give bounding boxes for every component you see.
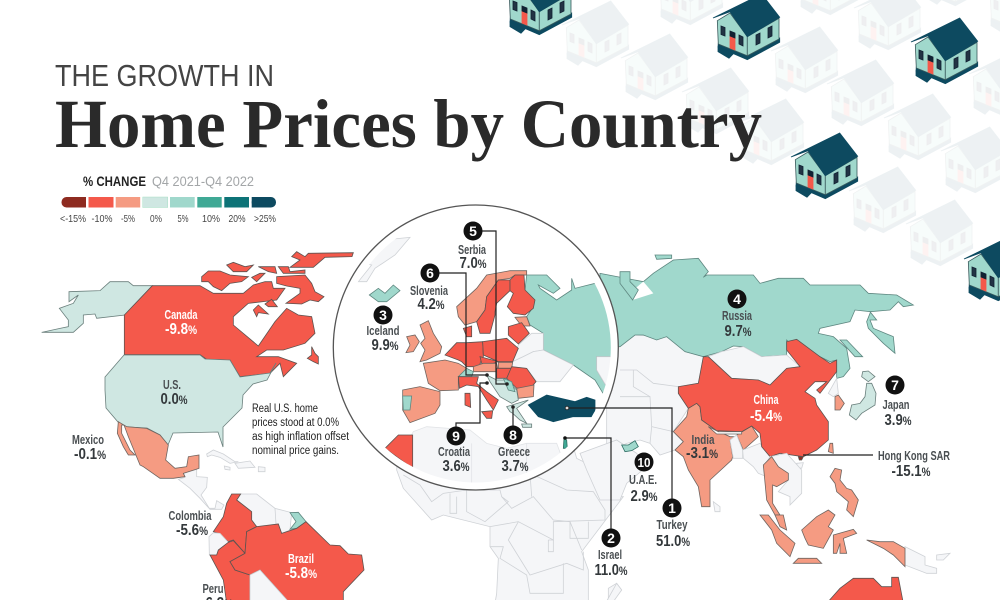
rank 9: Croatia [438,426,471,475]
italy [458,377,498,410]
leader lines [430,231,873,537]
rank 9: Croatia: 9 [452,428,460,444]
mexico [117,422,199,478]
france and iberia [423,360,467,391]
rank 3: Iceland: 9.9% [372,337,399,354]
label: Colombia [168,509,212,539]
label: Canada: -9.8% [165,321,197,338]
nordics [457,271,527,325]
label: Mexico [72,433,106,463]
note: real U.S. prices: prices stood at 0.0% [252,417,339,429]
rank 10: U.A.E. [629,452,658,505]
rank 2: Israel: 11.0% [594,562,628,579]
south america [209,494,364,600]
rank 8: Greece: 3.7% [502,458,529,475]
note: real U.S. prices: nominal price gains. [252,445,339,457]
label: China [750,393,782,425]
rank 3: Iceland: Iceland [366,324,400,338]
title: THE GROWTH IN [55,58,274,93]
label: China: China [754,393,779,407]
rank 4: Russia: 4 [733,291,741,307]
rank 5: Serbia: 7.0% [460,255,487,272]
rank 7: Japan: 3.9% [884,412,912,429]
north america [42,252,353,509]
mongolia [708,347,800,385]
legend: % CHANGE [83,173,146,189]
legend: 0% [150,213,162,225]
label: Peru: Peru [202,582,224,596]
note: real U.S. prices: as high inflation offset [252,431,350,443]
rank 1: Turkey: 1 [668,500,676,516]
legend [60,173,276,225]
legend: -10% [92,213,112,225]
circle inset: europe [333,205,623,500]
alaska [42,282,152,332]
label: Canada [164,308,198,338]
british isles [420,321,442,362]
rank 10: U.A.E.: 2.9% [630,488,658,505]
rank 7: Japan [882,376,912,429]
rank 6: Slovenia: 6 [426,265,434,281]
uae [622,441,638,452]
rank 1: Turkey [656,498,690,550]
label: Hong Kong SAR: -15.1% [892,463,931,480]
greenland [358,237,411,282]
title: Home Prices by Country [55,86,762,162]
rank 5: Serbia: 5 [469,223,477,239]
label: Hong Kong SAR: Hong Kong SAR [878,449,950,463]
legend: 20% [228,213,246,225]
rank 2: Israel: Israel [598,548,622,562]
rank 5: Serbia: Serbia [458,243,487,257]
label: Brazil [285,552,317,582]
rank 2: Israel: 2 [607,530,615,546]
label: Peru [201,582,233,600]
rank 7: Japan: 7 [891,377,899,393]
rank 1: Turkey: Turkey [656,518,688,532]
rank 3: Iceland [366,306,400,354]
rank 6: Slovenia [410,264,449,313]
label: Mexico: Mexico [72,433,104,447]
rank 8: Greece: 8 [509,427,517,443]
southeast asia [770,453,802,505]
label: India [686,433,718,462]
rank 10: U.A.E.: 10 [638,456,651,470]
label: India: -3.1% [686,445,718,462]
rank 5: Serbia [458,222,487,272]
rank 10: U.A.E.: U.A.E. [629,473,657,487]
rank 9: Croatia: 3.6% [442,458,470,475]
background houses [562,0,1000,266]
legend: <-15% [60,213,86,225]
canada [124,252,353,377]
label: India: India [692,433,715,447]
north africa in inset [412,426,560,482]
india [673,403,735,507]
label: U.S.: U.S. [163,378,181,392]
legend: 5% [178,213,188,225]
highlighted houses [505,0,1000,301]
japan [849,383,876,420]
world map: Middle East and Central Asia [580,335,703,500]
legend: 10% [202,213,220,225]
legend: Q4 2021-Q4 2022 [152,173,254,189]
rank 2: Israel [594,528,628,579]
label: Mexico: -0.1% [74,446,106,463]
legend: >25% [254,213,276,225]
label: Brazil: Brazil [288,552,314,566]
turkey [528,395,595,422]
china [678,339,837,457]
israel [563,438,567,448]
australia [827,577,903,600]
world map: Africa [397,423,623,600]
madagascar [607,583,622,600]
rank 4: Russia: Russia [722,309,753,323]
note: real U.S. prices [252,403,350,457]
label: China: -5.4% [750,408,782,425]
rank 8: Greece: Greece [498,445,530,459]
russia east [600,258,913,378]
rank 6: Slovenia: 4.2% [418,296,445,313]
rank 7: Japan: Japan [882,398,910,412]
rank 8: Greece [498,426,530,475]
label: Colombia: -5.6% [176,522,208,539]
legend: -5% [121,213,135,225]
note: real U.S. prices: Real U.S. home [252,403,318,415]
label: U.S. [160,378,188,408]
rank 4: Russia [722,290,753,340]
central america and caribbean [117,422,265,509]
label: U.S.: 0.0% [160,391,188,408]
label: Canada: Canada [164,308,198,322]
iceland [369,285,400,302]
usa [105,355,276,447]
asia and oceania [600,255,950,600]
central europe [445,342,485,367]
rank 3: Iceland: 3 [379,307,387,323]
rank 6: Slovenia: Slovenia [410,284,449,298]
label: Hong Kong SAR [878,449,950,480]
russia west [525,274,611,394]
hong kong [798,457,803,460]
label: Colombia: Colombia [168,509,212,523]
rank 4: Russia: 9.7% [724,323,752,340]
rank 9: Croatia: Croatia [438,445,471,459]
label: Brazil: -5.8% [285,565,317,582]
rank 1: Turkey: 51.0% [656,533,690,550]
balkans [487,375,518,403]
